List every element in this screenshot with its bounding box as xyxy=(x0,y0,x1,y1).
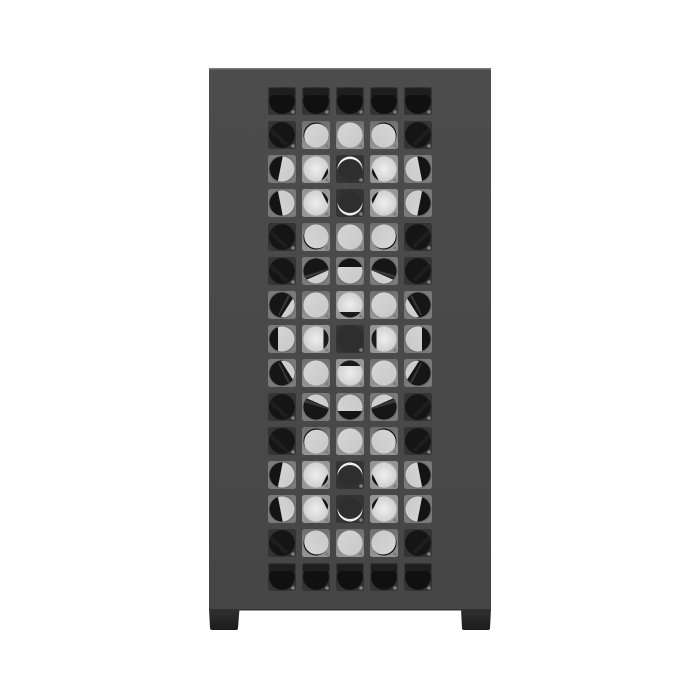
grid row 1 xyxy=(268,87,432,115)
underside shadow strip xyxy=(239,609,461,610)
grid row 14 xyxy=(268,529,432,557)
left foot xyxy=(209,609,240,630)
grid row 12 xyxy=(268,461,432,490)
illustration: PC case front view xyxy=(209,68,491,630)
grid row 6 xyxy=(268,257,432,285)
grid row 10 xyxy=(268,393,432,421)
grid row 9 xyxy=(268,358,432,387)
grid row 3 xyxy=(268,155,432,184)
ventilation grid with three fans xyxy=(268,87,432,591)
grid row 15 xyxy=(268,563,432,591)
right foot xyxy=(461,609,491,630)
grid row 13 xyxy=(268,494,432,523)
grid row 8 xyxy=(268,325,432,353)
grid row 11 xyxy=(268,427,432,455)
grid row 7 xyxy=(268,291,432,320)
grid row 4 xyxy=(268,188,432,217)
grid row 5 xyxy=(268,223,432,251)
grid row 2 xyxy=(268,121,432,149)
case body xyxy=(209,68,491,609)
